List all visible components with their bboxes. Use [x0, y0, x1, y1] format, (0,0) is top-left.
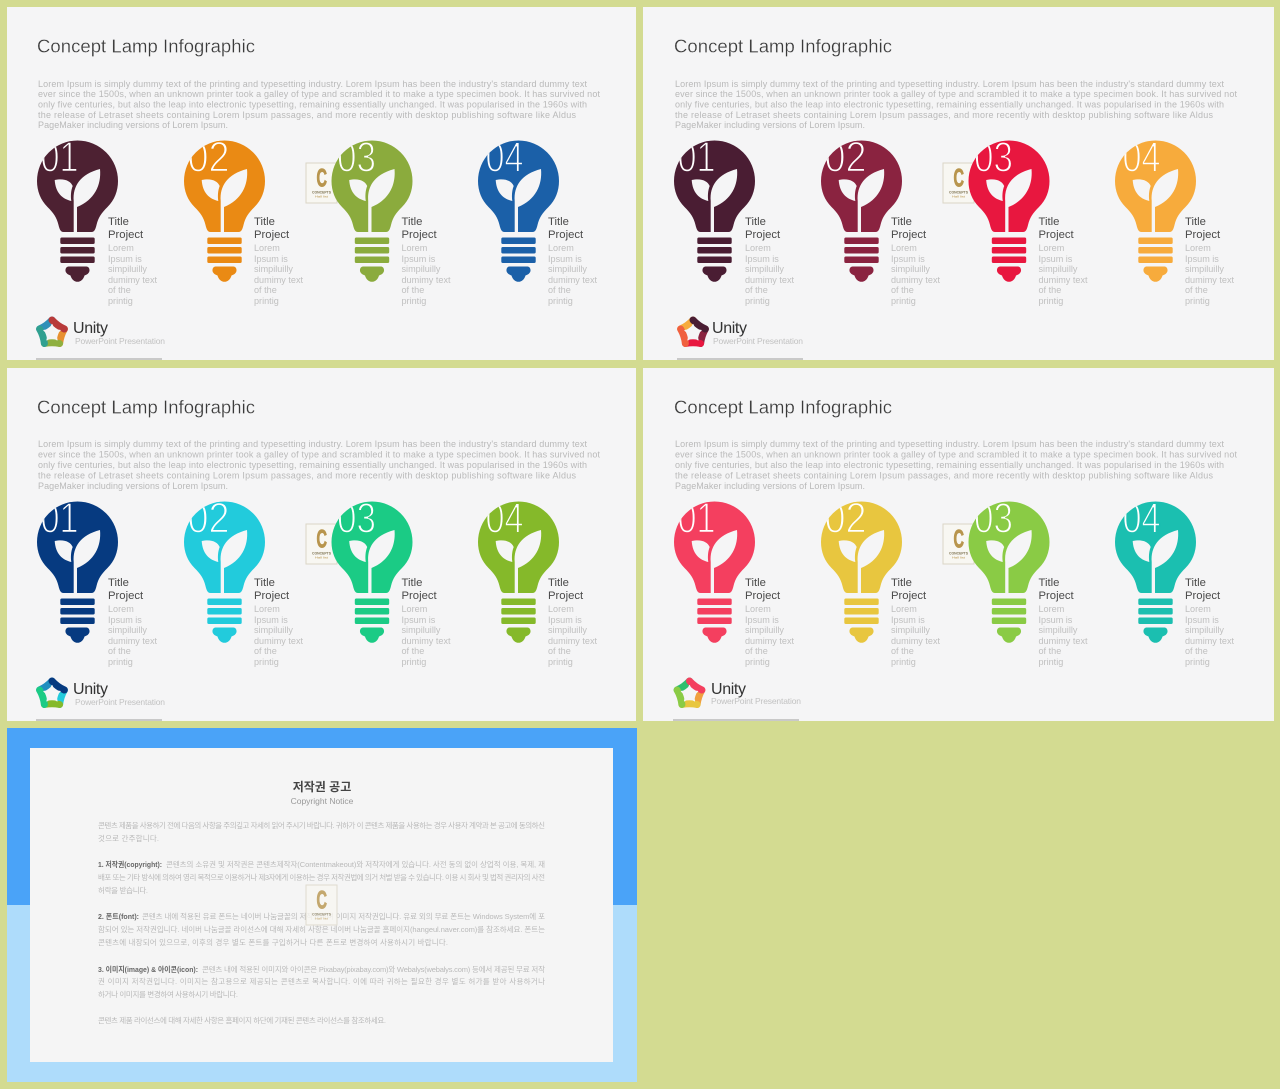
label 03: dumimy text	[1038, 636, 1088, 646]
intro text block: PageMaker including versions of Lorem Ipsum.	[38, 481, 228, 491]
label 02: Ipsum is	[891, 254, 925, 264]
copyright section 1: 배포 또는 기타 방식에 의하여 영리 목적으로 이용하거나 제3자에게 이용하는 경우 저작권법에 의거 처벌 받을 수 있습니다. 이용 시 회사 및 법적 권리자의 사전	[98, 872, 545, 882]
intro text block: the release of Letraset sheets containing Lorem Ipsum passages, and more recently with desktop publishing software like Aldus	[675, 470, 1214, 480]
copyright section 1: 1. 저작권(copyright):	[98, 859, 162, 869]
watermark	[306, 524, 337, 564]
label 01: dumimy text	[108, 636, 157, 646]
label 03	[1038, 216, 1088, 306]
intro text block: PageMaker including versions of Lorem Ipsum.	[675, 120, 865, 130]
label 04: Lorem	[1185, 243, 1211, 253]
label 03: printig	[402, 657, 426, 667]
label 03: Title	[402, 577, 422, 589]
label 03: printig	[402, 296, 426, 306]
label 04: dumimy text	[548, 275, 597, 285]
title: Concept Lamp Infographic	[37, 36, 255, 56]
bulb 02: 02	[188, 134, 230, 182]
title: Concept Lamp Infographic	[37, 396, 255, 418]
label 04	[1185, 577, 1234, 667]
label 03: simpiluilly	[402, 264, 441, 274]
label 01: Title	[745, 216, 766, 228]
bulb 02: 02	[188, 494, 230, 542]
bulb 03: 03	[974, 494, 1013, 542]
label 01: dumimy text	[745, 636, 794, 646]
copyright intro: 것으로 간주합니다.	[98, 833, 159, 843]
label 03: Ipsum is	[402, 254, 436, 264]
label 03: Project	[1038, 229, 1075, 241]
intro text block	[675, 439, 1237, 491]
intro text block: Lorem Ipsum is simply dummy text of the printing and typesetting industry. Lorem Ipsum has been the industry's standard dummy text	[675, 439, 1224, 449]
bulb 02: 02	[824, 134, 866, 182]
label 04: Ipsum is	[1185, 615, 1219, 625]
label 02: simpiluilly	[891, 625, 930, 635]
label 01: Ipsum is	[108, 254, 142, 264]
label 01: Title	[108, 577, 129, 589]
label 03: dumimy text	[402, 275, 451, 285]
label 03: Lorem	[1038, 604, 1064, 614]
bulb 04: 04	[486, 494, 524, 542]
bulb 04	[1115, 134, 1196, 282]
label 01: Project	[108, 229, 144, 241]
label 04: dumimy text	[1185, 275, 1234, 285]
bulb 01: 01	[678, 494, 716, 542]
label 04: Lorem	[548, 604, 574, 614]
label 02: simpiluilly	[254, 264, 293, 274]
bulb 02: 02	[824, 494, 866, 542]
brand name: Unity	[711, 681, 746, 698]
copyright section 3: 콘텐츠 내에 적용된 이미지와 아이콘은 Pixabay(pixabay.com)와 Webalys(webalys.com) 등에서 제공된 무료 저작	[202, 964, 545, 974]
label 02: Title	[891, 577, 912, 589]
label 02: Title	[254, 216, 275, 228]
copyright intro: 콘텐츠 제품을 사용하기 전에 다음의 사항을 주의깊고 자세히 읽어 주시기 바랍니다. 귀하가 이 콘텐츠 제품을 사용하는 경우 사용자 계약과 본 공고에 동의하신	[98, 820, 545, 830]
label 03: Title	[1038, 216, 1059, 228]
copyright section 2: 콘텐츠 내에 적용된 유료 폰트는 네이버 나눔글꼴의 저작권이며 이미지 저작권입니다. 유료 외의 무료 폰트는 Windows System에 포	[142, 911, 545, 921]
label 03	[1038, 577, 1088, 667]
label 01: Lorem	[745, 604, 771, 614]
intro text block: the release of Letraset sheets containing Lorem Ipsum passages, and more recently with desktop publishing software like Aldus	[38, 110, 576, 120]
bulb 04	[1115, 494, 1196, 643]
bulb 03: 03	[974, 134, 1013, 182]
label 01: Project	[745, 590, 781, 602]
label 01: simpiluilly	[745, 264, 784, 274]
intro text block: only five centuries, but also the leap into electronic typesetting, remaining essentially unchanged. It was popularised in the 1960s with	[675, 100, 1224, 110]
label 01: Title	[745, 577, 766, 589]
panel: copyright notice	[7, 728, 637, 1082]
bulb 01	[674, 494, 755, 643]
label 03: printig	[1038, 296, 1063, 306]
label 04	[1185, 216, 1234, 306]
label 03: of the	[402, 646, 424, 656]
copyright section 3	[98, 964, 545, 999]
footer bar	[673, 719, 799, 721]
watermark: Hall list	[952, 556, 965, 560]
label 04: simpiluilly	[548, 264, 587, 274]
label 02: dumimy text	[254, 636, 303, 646]
label 02	[254, 577, 303, 667]
label 03: Project	[402, 590, 438, 602]
watermark: CONCEPTS	[949, 190, 968, 194]
label 04: Project	[548, 590, 584, 602]
label 02: simpiluilly	[254, 625, 293, 635]
label 02: Ipsum is	[891, 615, 925, 625]
watermark	[943, 524, 974, 564]
label 02: printig	[891, 657, 916, 667]
copyright section 2	[98, 911, 545, 947]
brand name: Unity	[73, 320, 108, 337]
label 04: of the	[1185, 646, 1208, 656]
brand subtitle: PowerPoint Presentation	[75, 697, 165, 707]
label 01: printig	[108, 657, 133, 667]
label 01: of the	[108, 285, 131, 295]
label 03: simpiluilly	[1038, 625, 1078, 635]
label 04: Project	[1185, 229, 1221, 241]
intro text block: Lorem Ipsum is simply dummy text of the printing and typesetting industry. Lorem Ipsum has been the industry's standard dummy text	[38, 439, 587, 449]
brand subtitle: PowerPoint Presentation	[711, 696, 801, 706]
label 02	[891, 577, 940, 667]
watermark: CONCEPTS	[312, 912, 331, 916]
label 02: dumimy text	[891, 275, 940, 285]
bulb 03	[968, 134, 1050, 282]
copyright section 2: 2. 폰트(font):	[98, 912, 139, 921]
label 04	[548, 577, 597, 667]
watermark	[306, 163, 337, 203]
label 02: Lorem	[254, 243, 280, 253]
label 04: printig	[548, 296, 573, 306]
label 01: dumimy text	[108, 275, 157, 285]
watermark: C	[316, 526, 327, 554]
label 04: printig	[548, 657, 573, 667]
label 02: Project	[891, 229, 927, 241]
label 04: Title	[548, 216, 569, 228]
copyright section 3: 권 이미지 저작권입니다. 이미지는 참고용으로 제공되는 콘텐츠로 복사합니다. 이에 따라 귀하는 필요한 경우 별도 허가를 받아 사용하거나	[98, 976, 545, 986]
bulb 01	[37, 494, 118, 643]
footer bar	[677, 358, 803, 360]
label 01: Title	[108, 216, 129, 228]
label 04: Title	[1185, 216, 1206, 228]
watermark	[306, 885, 337, 925]
label 02: of the	[254, 285, 277, 295]
label 02: Ipsum is	[254, 254, 288, 264]
intro text block: PageMaker including versions of Lorem Ipsum.	[38, 120, 228, 130]
label 01: Ipsum is	[108, 615, 142, 625]
label 02	[891, 216, 940, 306]
label 01: dumimy text	[745, 275, 794, 285]
copyright heading: 저작권 공고	[293, 779, 351, 794]
watermark: CONCEPTS	[312, 550, 331, 556]
label 04: printig	[1185, 296, 1210, 306]
label 02	[254, 216, 303, 306]
bulb 02	[184, 134, 265, 282]
label 02: Project	[254, 590, 290, 602]
label 03: dumimy text	[1038, 275, 1088, 285]
label 02: printig	[891, 296, 916, 306]
label 03: simpiluilly	[402, 625, 441, 635]
label 02: Project	[891, 590, 927, 602]
bulb 01: 01	[678, 134, 716, 182]
label 01: printig	[108, 296, 133, 306]
label 04: printig	[1185, 657, 1210, 667]
bulb 01: 01	[40, 134, 78, 182]
label 04: simpiluilly	[548, 625, 587, 635]
bulb 03: 03	[337, 134, 376, 182]
label 04: simpiluilly	[1185, 264, 1224, 274]
label 04: Lorem	[1185, 604, 1211, 614]
label 01: of the	[108, 646, 131, 656]
bulb 01: 01	[40, 494, 78, 542]
bulb 04: 04	[486, 134, 524, 182]
icon: logo	[677, 681, 702, 704]
label 04: of the	[548, 646, 571, 656]
icon: logo	[681, 320, 705, 344]
label 01: printig	[745, 296, 770, 306]
bulb 04	[478, 134, 559, 282]
label 02: of the	[254, 646, 277, 656]
label 04: of the	[1185, 285, 1208, 295]
intro text block	[38, 79, 600, 130]
intro text block: the release of Letraset sheets containing Lorem Ipsum passages, and more recently with desktop publishing software like Aldus	[675, 110, 1214, 120]
brand name: Unity	[712, 320, 747, 337]
label 01: simpiluilly	[108, 264, 147, 274]
intro text block: ever since the 1500s, when an unknown printer took a galley of type and scrambled it to make a type specimen book. It has survived not	[38, 89, 600, 99]
label 01	[745, 577, 794, 667]
label 03: Title	[402, 216, 422, 228]
intro text block: ever since the 1500s, when an unknown printer took a galley of type and scrambled it to make a type specimen book. It has survived not	[675, 450, 1237, 460]
brand name: Unity	[73, 681, 108, 698]
label 01: printig	[745, 657, 770, 667]
label 02: Lorem	[891, 243, 917, 253]
label 03: Lorem	[402, 243, 427, 253]
bulb 03	[332, 134, 412, 282]
label 03: Ipsum is	[1038, 615, 1073, 625]
copyright footer line: 콘텐츠 제품 라이선스에 대해 자세한 사항은 홈페이지 하단에 기재된 콘텐츠 라이선스를 참조하세요.	[98, 1015, 386, 1025]
watermark: C	[316, 886, 327, 914]
label 03: printig	[1038, 657, 1063, 667]
label 03: Lorem	[402, 604, 427, 614]
brand subtitle: PowerPoint Presentation	[713, 336, 803, 346]
panel: infographic variant 4	[643, 368, 1274, 721]
bulb 04	[478, 494, 559, 643]
label 04: Project	[1185, 590, 1221, 602]
label 02: dumimy text	[891, 636, 940, 646]
bulb 03: 03	[337, 494, 376, 542]
watermark: CONCEPTS	[312, 190, 331, 194]
label 02: dumimy text	[254, 275, 303, 285]
bulb 02	[184, 494, 265, 643]
label 02: Project	[254, 229, 290, 241]
footer bar	[36, 719, 162, 721]
label 02: of the	[891, 285, 914, 295]
intro text block: ever since the 1500s, when an unknown printer took a galley of type and scrambled it to make a type specimen book. It has survived not	[38, 450, 600, 460]
copyright subheading: Copyright Notice	[291, 796, 354, 806]
label 03: Project	[1038, 590, 1075, 602]
label 01: Lorem	[108, 243, 134, 253]
label 04: of the	[548, 285, 571, 295]
label 04: dumimy text	[1185, 636, 1234, 646]
bulb 02	[821, 494, 902, 643]
label 02: Ipsum is	[254, 615, 288, 625]
label 04: simpiluilly	[1185, 625, 1224, 635]
bulb 01	[674, 134, 755, 282]
panel: infographic variant 3	[7, 368, 636, 721]
intro text block: Lorem Ipsum is simply dummy text of the printing and typesetting industry. Lorem Ipsum has been the industry's standard dummy text	[38, 79, 587, 89]
intro text block: only five centuries, but also the leap into electronic typesetting, remaining essentially unchanged. It was popularised in the 1960s with	[38, 100, 587, 110]
label 02: simpiluilly	[891, 264, 930, 274]
intro text block: the release of Letraset sheets containing Lorem Ipsum passages, and more recently with desktop publishing software like Aldus	[38, 470, 576, 480]
brand subtitle: PowerPoint Presentation	[75, 336, 165, 346]
label 03: of the	[1038, 646, 1061, 656]
intro text block: PageMaker including versions of Lorem Ipsum.	[675, 481, 865, 491]
label 01: Ipsum is	[745, 615, 779, 625]
label 01: Project	[745, 229, 781, 241]
label 02: printig	[254, 657, 279, 667]
label 02: printig	[254, 296, 279, 306]
label 02: Title	[891, 216, 912, 228]
intro text block: ever since the 1500s, when an unknown printer took a galley of type and scrambled it to make a type specimen book. It has survived not	[675, 89, 1237, 99]
copyright section 1: 콘텐츠의 소유권 및 저작권은 콘텐츠제작자(Contentmakeout)와 저작자에게 있습니다. 사전 동의 없이 상업적 이용, 복제, 재	[166, 859, 545, 869]
watermark: C	[316, 164, 327, 192]
icon: logo	[40, 320, 64, 344]
label 01	[745, 216, 794, 306]
watermark: Hall list	[315, 916, 328, 920]
label 01: of the	[745, 646, 768, 656]
label 04: Project	[548, 229, 584, 241]
bulb 01	[37, 134, 118, 282]
copyright section 1	[98, 859, 545, 895]
copyright section 3: 3. 이미지(image) & 아이콘(icon):	[98, 964, 198, 974]
title: Concept Lamp Infographic	[674, 396, 892, 418]
watermark	[943, 163, 974, 203]
watermark: C	[954, 164, 964, 192]
watermark: C	[954, 526, 964, 554]
copyright section 1: 허락을 받습니다.	[98, 885, 148, 895]
intro text block: only five centuries, but also the leap into electronic typesetting, remaining essentially unchanged. It was popularised in the 1960s with	[38, 460, 587, 470]
watermark: Hall list	[315, 556, 328, 560]
intro text block	[38, 439, 600, 491]
label 01: Lorem	[108, 604, 134, 614]
label 03: Title	[1038, 577, 1059, 589]
bulb 03	[968, 494, 1050, 643]
intro text block: Lorem Ipsum is simply dummy text of the printing and typesetting industry. Lorem Ipsum has been the industry's standard dummy text	[675, 79, 1224, 89]
label 01: of the	[745, 285, 768, 295]
label 01	[108, 216, 157, 306]
label 03: of the	[402, 285, 424, 295]
label 01: Project	[108, 590, 144, 602]
label 04: Ipsum is	[1185, 254, 1219, 264]
label 01: Lorem	[745, 243, 771, 253]
label 04: Ipsum is	[548, 254, 582, 264]
label 04: Ipsum is	[548, 615, 582, 625]
label 03: dumimy text	[402, 636, 451, 646]
label 03: of the	[1038, 285, 1061, 295]
watermark: CONCEPTS	[949, 550, 968, 556]
label 03	[402, 577, 451, 667]
label 02: Lorem	[891, 604, 917, 614]
label 01: simpiluilly	[108, 625, 147, 635]
panel: infographic variant 1	[7, 7, 636, 360]
label 04: Lorem	[548, 243, 574, 253]
label 04	[548, 216, 597, 306]
copyright section 2: 함되어 있는 저작권입니다. 네이버 나눔글꼴 라이선스에 대해 자세히 사항은 네이버 나눔글꼴 홈페이지(hangeul.naver.com)를 참조하세요. 폰트는	[98, 924, 545, 934]
label 01	[108, 577, 157, 667]
copyright intro	[98, 820, 545, 843]
copyright section 2: 콘텐츠에 내장되어 있으므로, 이후의 경우 별도 폰트를 구입하거나 다른 폰트로 변경하여 사용하시기 바랍니다.	[98, 937, 448, 947]
label 03: simpiluilly	[1038, 264, 1078, 274]
label 03	[402, 216, 451, 306]
label 03: Project	[402, 229, 438, 241]
watermark: Hall list	[952, 194, 965, 198]
label 01: Ipsum is	[745, 254, 779, 264]
bulb 02	[821, 134, 902, 282]
label 02: Title	[254, 577, 275, 589]
copyright section 3: 하거나 이미지를 변경하여 사용하시기 바랍니다.	[98, 989, 238, 999]
label 04: Title	[548, 577, 569, 589]
bulb 04: 04	[1122, 494, 1160, 542]
label 02: Lorem	[254, 604, 280, 614]
title: Concept Lamp Infographic	[674, 36, 892, 56]
bulb 04: 04	[1122, 134, 1160, 182]
label 04: Title	[1185, 577, 1206, 589]
icon: logo	[40, 681, 64, 704]
label 03: Ipsum is	[402, 615, 436, 625]
bulb 03	[332, 494, 412, 643]
label 01: simpiluilly	[745, 625, 784, 635]
label 04: dumimy text	[548, 636, 597, 646]
label 03: Lorem	[1038, 243, 1064, 253]
label 02: of the	[891, 646, 914, 656]
label 03: Ipsum is	[1038, 254, 1073, 264]
intro text block: only five centuries, but also the leap into electronic typesetting, remaining essentially unchanged. It was popularised in the 1960s with	[675, 460, 1224, 470]
panel: infographic variant 2	[643, 7, 1274, 360]
watermark: Hall list	[315, 194, 328, 198]
intro text block	[675, 79, 1237, 130]
footer bar	[36, 358, 162, 360]
